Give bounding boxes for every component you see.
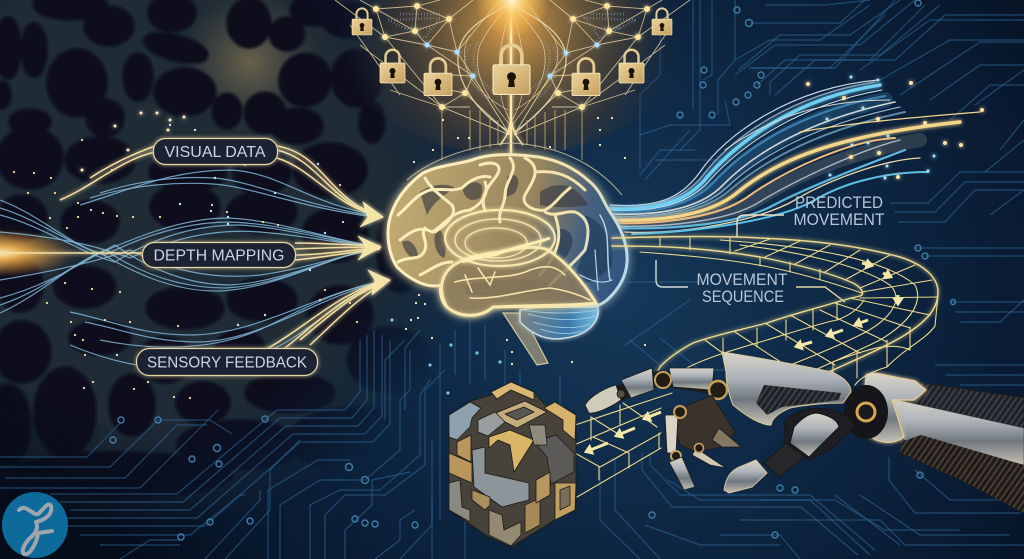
gyri (398, 158, 612, 290)
padlocks (352, 8, 672, 96)
arc over brain (407, 143, 622, 195)
label: visual data: VISUAL DATA (164, 144, 266, 161)
label: predicted movement (794, 194, 884, 229)
robotic arm (585, 352, 1024, 513)
label: sensory feedback: SENSORY FEEDBACK (147, 354, 307, 372)
lower grid strip (566, 393, 672, 497)
wrist joint (844, 385, 888, 439)
particles right (808, 77, 982, 178)
hand back (722, 352, 851, 425)
direction arrows (588, 263, 898, 451)
movement path grid (566, 236, 938, 497)
label: sensory feedback (136, 348, 318, 376)
blue dotted net (388, 14, 636, 100)
callout leader: predicted movement (737, 215, 784, 237)
label: visual data (154, 138, 278, 164)
stream arrows (358, 202, 390, 295)
logo badge (2, 492, 68, 558)
label: depth mapping (142, 242, 296, 268)
left source glow (0, 229, 75, 277)
temporal folds (455, 267, 590, 300)
input data streams (0, 145, 390, 369)
gold streams (0, 145, 390, 350)
index finger (585, 368, 727, 413)
central limbic rings (445, 210, 555, 266)
lower fingers (665, 395, 741, 490)
brain outline (388, 155, 627, 315)
network links (335, 0, 690, 135)
cerebellum (520, 306, 598, 339)
brain (388, 155, 627, 365)
centre beam (500, 0, 523, 155)
grid ribs (660, 238, 938, 392)
blue streams (0, 170, 388, 369)
vertical feed lines (442, 107, 582, 160)
particles centre (392, 118, 645, 393)
label: depth mapping: DEPTH MAPPING (154, 248, 284, 264)
label: movement sequence (696, 271, 788, 306)
brain stem (503, 313, 548, 365)
grid rim (612, 236, 938, 392)
label: predicted movement: PREDICTED (795, 194, 883, 212)
particles left (14, 113, 357, 398)
label: movement sequence: SEQUENCE (702, 288, 784, 306)
network nodes (376, 6, 647, 107)
cube (449, 382, 576, 547)
sun at top (474, 0, 550, 38)
neural web background (0, 0, 434, 476)
hand carbon plate (756, 385, 841, 415)
circuit terminals (110, 0, 956, 540)
thumb (724, 408, 855, 493)
top glow (332, 0, 692, 155)
temporal lobe (442, 247, 596, 315)
wrist cuff (862, 373, 926, 442)
forearm (885, 380, 1024, 513)
sulci (402, 175, 612, 296)
label: predicted movement: MOVEMENT (794, 211, 884, 229)
neural network with padlocks (335, 0, 690, 160)
output ribbons (610, 80, 980, 234)
callout leader: movement sequence (656, 260, 845, 302)
label: movement sequence: MOVEMENT (696, 271, 788, 289)
